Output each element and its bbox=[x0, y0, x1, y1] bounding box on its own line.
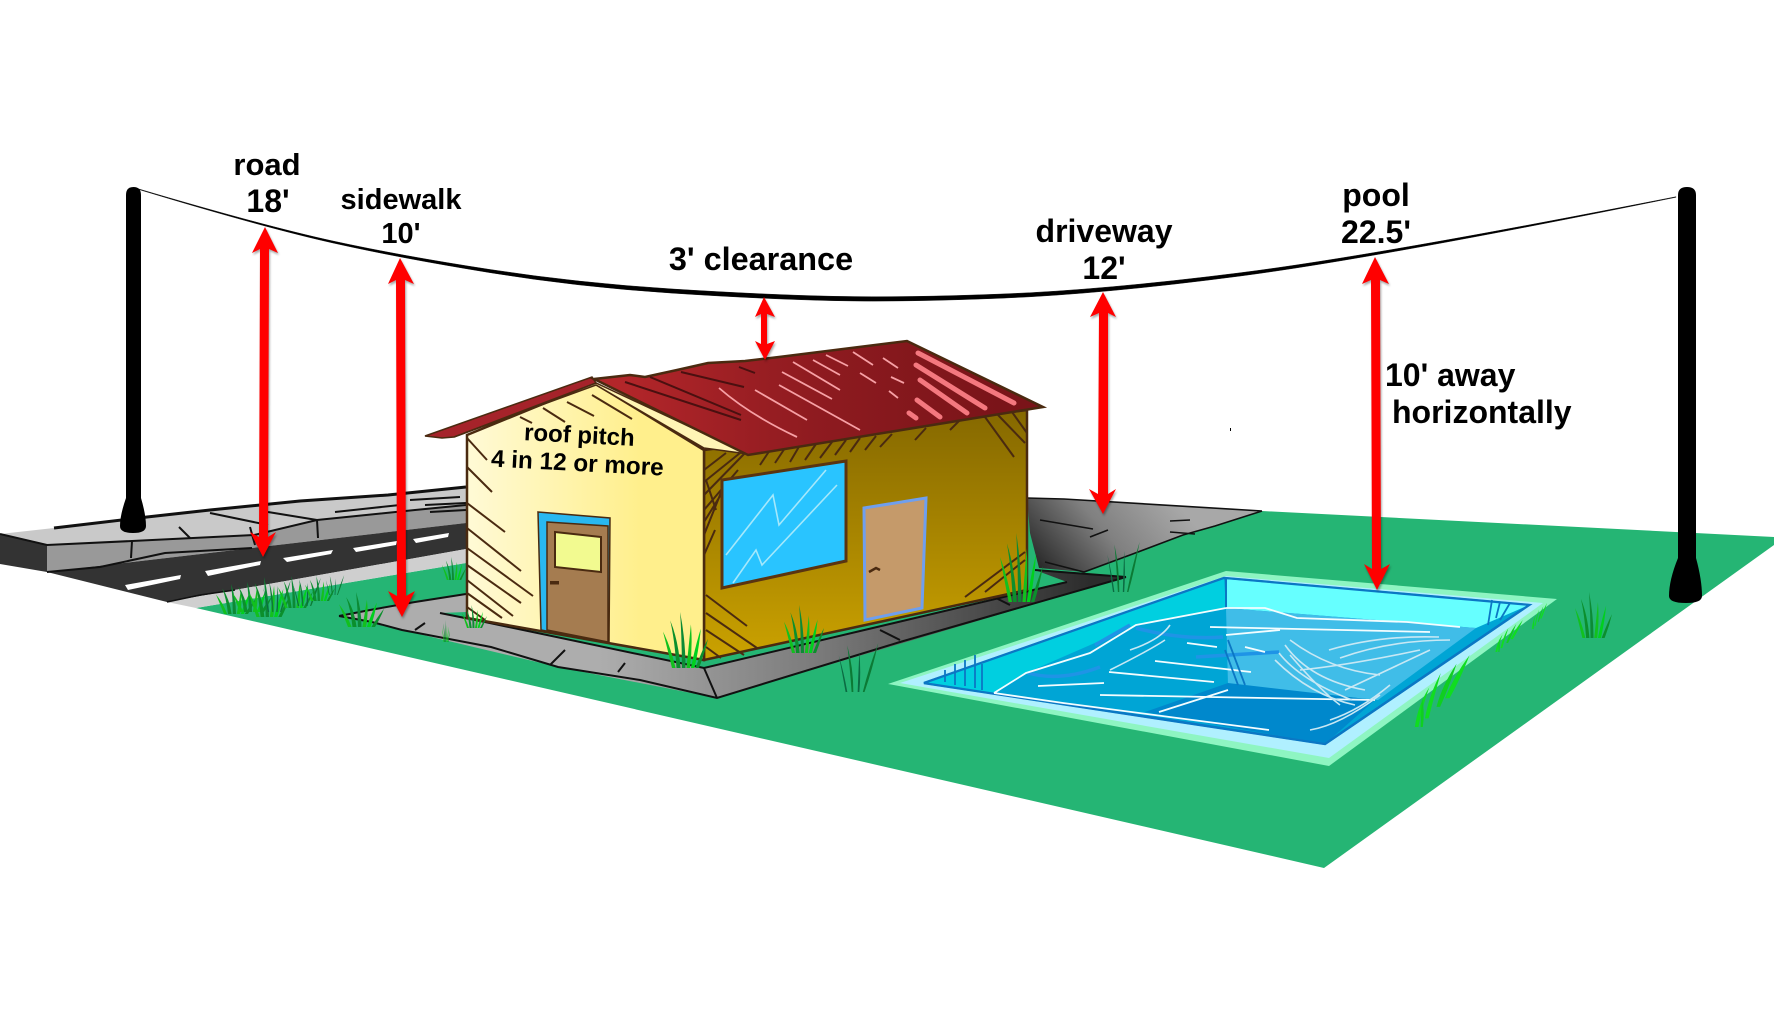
house bbox=[425, 341, 1043, 660]
walkway around house bbox=[339, 570, 1126, 698]
label: horizontal distance from pool: horizontally bbox=[1392, 394, 1572, 430]
left pole bbox=[120, 187, 146, 533]
left pool wall bbox=[924, 578, 1226, 693]
door window bbox=[555, 532, 601, 572]
label: driveway: driveway bbox=[1036, 213, 1173, 249]
light water bbox=[1226, 608, 1476, 700]
grass: side wall bbox=[784, 605, 824, 653]
front door bbox=[538, 512, 610, 643]
right pole bbox=[1669, 187, 1702, 603]
small speck bbox=[1230, 428, 1231, 431]
arrow: roof clearance bbox=[755, 297, 775, 360]
label: horizontal distance from pool bbox=[1385, 357, 1572, 430]
gable red edge bbox=[425, 377, 596, 438]
walkway cracks bbox=[339, 570, 1126, 698]
roof panel bbox=[594, 341, 1043, 455]
side wall bbox=[704, 410, 1027, 660]
water white strokes bbox=[994, 608, 1460, 730]
label: driveway: 12' bbox=[1082, 250, 1126, 286]
deep water bbox=[1145, 683, 1375, 744]
road dashes bbox=[125, 533, 449, 590]
label: road: road bbox=[233, 147, 301, 182]
road surface bbox=[47, 523, 466, 602]
label: road: 18' bbox=[246, 183, 290, 219]
water scribbles bbox=[1110, 625, 1450, 730]
roof highlights bbox=[719, 352, 904, 437]
grass: back corner bbox=[1000, 533, 1043, 602]
walkway surface bbox=[339, 570, 1126, 698]
label: driveway bbox=[1036, 213, 1173, 286]
door knob bbox=[550, 581, 559, 584]
label: sidewalk bbox=[341, 184, 462, 250]
grass: small blade bbox=[442, 620, 450, 642]
roof strong highlights bbox=[909, 353, 1014, 418]
back pool wall bbox=[1226, 579, 1529, 628]
label: pool: 22.5' bbox=[1341, 214, 1411, 250]
door leaf bbox=[547, 522, 608, 642]
grass: house corner left bbox=[462, 605, 487, 628]
label: horizontal distance from pool: 10' away bbox=[1385, 357, 1516, 393]
arrow: sidewalk bbox=[388, 258, 415, 617]
side door leaf bbox=[864, 498, 926, 620]
grass: pool side top bbox=[1532, 603, 1547, 629]
front wall bbox=[467, 383, 704, 660]
grass: lawn by walkway bbox=[839, 643, 878, 692]
arrow: driveway bbox=[1089, 292, 1116, 514]
arrow: road bbox=[250, 227, 278, 557]
side window bbox=[722, 461, 846, 588]
road and curb bbox=[0, 487, 466, 608]
label: roof pitch bbox=[490, 419, 664, 482]
label: roof clearance: 3' clearance bbox=[669, 241, 853, 277]
grass: walkway start bbox=[339, 592, 384, 627]
window pane bbox=[722, 461, 846, 588]
window glints bbox=[726, 470, 837, 583]
pool bbox=[888, 571, 1557, 766]
driveway surface bbox=[1027, 498, 1262, 572]
gable eave bbox=[425, 377, 748, 454]
side door bbox=[864, 498, 926, 620]
road shoulder bbox=[167, 549, 466, 608]
grass: roadside bbox=[216, 575, 344, 617]
pool edge lines bbox=[924, 578, 1529, 744]
curb end bbox=[0, 534, 47, 572]
pool deck bbox=[900, 576, 1543, 758]
driveway bbox=[1027, 498, 1262, 572]
label: sidewalk: sidewalk bbox=[341, 184, 462, 216]
water blue strokes bbox=[1028, 625, 1279, 676]
curb cracks bbox=[0, 487, 466, 602]
pool outer border bbox=[888, 571, 1557, 766]
curb side bbox=[47, 505, 466, 572]
grass: pool side mid bbox=[1495, 620, 1523, 652]
door frame bbox=[538, 512, 610, 643]
roof dark streaks bbox=[625, 367, 755, 420]
roof bbox=[594, 341, 1043, 455]
pool corner hatching bbox=[945, 600, 1510, 690]
grass tufts bbox=[216, 533, 1612, 727]
label: pool bbox=[1341, 177, 1411, 250]
pool basin bbox=[924, 578, 1529, 744]
label: sidewalk: 10' bbox=[381, 218, 421, 250]
grass: driveway bbox=[1107, 542, 1140, 592]
arrow: pool bbox=[1362, 257, 1390, 590]
wall hatching bbox=[467, 395, 1027, 658]
grass: lawn right bbox=[1575, 592, 1612, 638]
grass: front corner bbox=[663, 612, 708, 668]
label: pool: pool bbox=[1342, 177, 1410, 213]
side door knob bbox=[869, 568, 880, 572]
curb top bbox=[0, 487, 466, 545]
overhead service wire bbox=[138, 189, 1676, 301]
label: roof pitch: 4 in 12 or more bbox=[490, 446, 664, 482]
grass: pool side low bbox=[1415, 655, 1470, 727]
label: road bbox=[233, 147, 301, 219]
gable underside bbox=[454, 383, 748, 454]
lawn bbox=[196, 498, 1774, 868]
grass: behind house bbox=[442, 557, 466, 580]
label: roof pitch: roof pitch bbox=[523, 419, 635, 452]
driveway outline bbox=[1027, 498, 1262, 572]
